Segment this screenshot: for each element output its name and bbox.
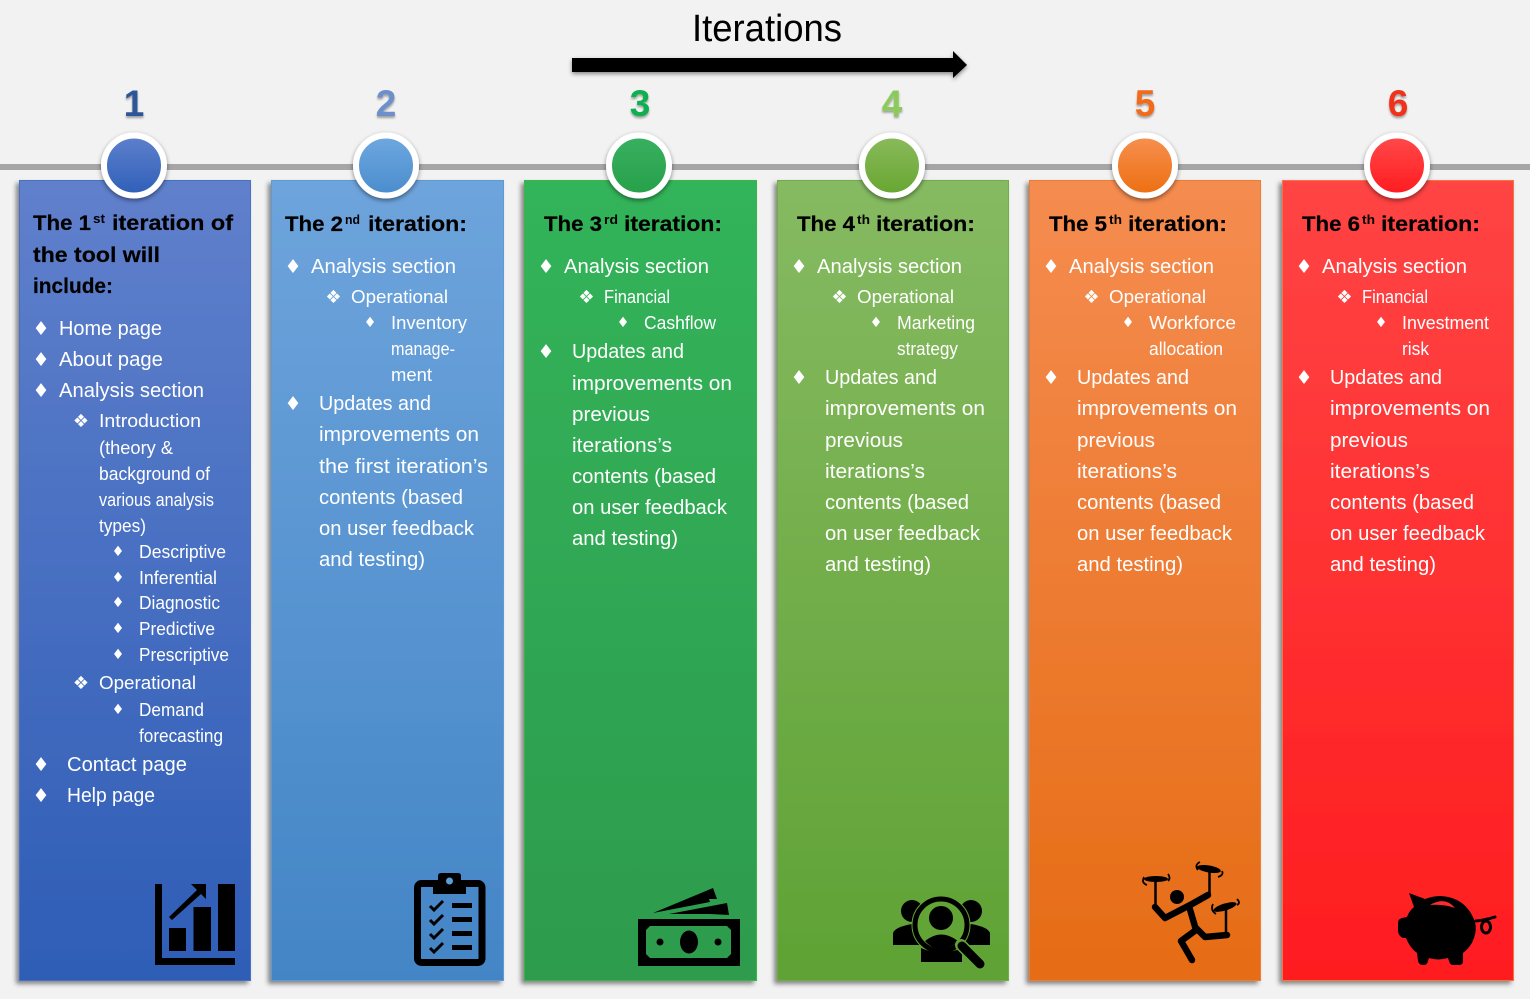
timeline node 6 [1367, 136, 1427, 196]
list 4: previous [825, 430, 903, 452]
timeline bar [0, 164, 1530, 170]
heading 3: rd [604, 212, 618, 227]
list 4: Operational [857, 287, 954, 307]
list 3: Updates and [572, 341, 684, 363]
list 2: manage- [391, 339, 455, 359]
list 6: ♦ [1295, 256, 1313, 278]
list 3: and testing) [572, 528, 678, 550]
heading 3 [544, 212, 722, 236]
list 3: ♦ [537, 256, 555, 278]
list 4: and testing) [825, 554, 931, 576]
list 2: and testing) [319, 549, 425, 571]
list 5: Updates and [1077, 367, 1189, 389]
title: Iterations [692, 8, 842, 50]
number 4: 4 [882, 83, 903, 124]
list 2: on user feedback [319, 518, 475, 540]
heading 2 [285, 212, 467, 236]
heading 5: iteration: [1128, 213, 1227, 236]
heading 4: The 4 [797, 213, 855, 236]
list 6: ♦ [1295, 367, 1313, 389]
list 5: Operational [1109, 287, 1206, 307]
list 4: improvements on [825, 398, 985, 420]
list 4: ♦ [790, 256, 808, 278]
list 1: ♦ [32, 380, 50, 402]
heading 4 [797, 212, 975, 236]
list 2 [284, 256, 488, 571]
list 2: improvements on [319, 424, 479, 446]
panel: iteration 1 [20, 83, 250, 980]
heading 4: iteration: [876, 213, 975, 236]
list 5 [1042, 256, 1237, 576]
list 4: ♦ [790, 367, 808, 389]
list 6: on user feedback [1330, 523, 1486, 545]
list 5: and testing) [1077, 554, 1183, 576]
panel: iteration 2 [272, 83, 504, 980]
heading 3: iteration: [624, 213, 722, 236]
icon: piggy bank [1398, 893, 1495, 965]
icon: people under magnifier [893, 897, 990, 964]
list 1: Descriptive [139, 542, 226, 562]
list 2: ment [391, 365, 432, 385]
list 1: ♦ [32, 349, 50, 371]
list 5: ♦ [1122, 315, 1134, 331]
list 4: ❖ [831, 287, 848, 308]
list 1: ♦ [112, 544, 124, 560]
list 3 [537, 256, 732, 550]
list 3: ♦ [537, 341, 555, 363]
list 3: contents (based [572, 466, 716, 488]
list 1: Contact page [67, 754, 187, 776]
heading 1: include: [33, 275, 113, 298]
list 1: Demand [139, 700, 204, 720]
timeline node 1 [104, 136, 164, 196]
list 5: ❖ [1083, 287, 1100, 308]
list 1: Introduction [99, 411, 201, 431]
list 1: ♦ [112, 570, 124, 586]
list 1: types) [99, 516, 146, 536]
list 4: contents (based [825, 492, 969, 514]
list 4: Marketing [897, 313, 975, 333]
list 1: ♦ [32, 754, 50, 776]
list 4: strategy [897, 339, 958, 359]
list 1: ❖ [73, 673, 89, 694]
list 1: ♦ [112, 621, 124, 637]
timeline node 3 [609, 136, 669, 196]
list 6: ♦ [1375, 315, 1387, 331]
heading 4: th [857, 212, 870, 227]
panel: iteration 3 [524, 83, 756, 980]
list 5: Workforce [1149, 313, 1236, 333]
timeline node 5 [1115, 136, 1175, 196]
list 2: Operational [351, 287, 448, 307]
list 3: ❖ [578, 287, 595, 308]
list 6: risk [1402, 339, 1430, 359]
heading 2: The 2 [285, 213, 343, 236]
heading 6: iteration: [1381, 213, 1480, 236]
list 1: About page [59, 349, 163, 371]
list 1: Help page [67, 785, 155, 807]
list 1: Diagnostic [139, 593, 220, 613]
list 5: previous [1077, 430, 1155, 452]
list 1: forecasting [139, 726, 223, 746]
list 1 [32, 318, 229, 807]
list 2: Updates and [319, 393, 431, 415]
list 2: ❖ [325, 287, 342, 308]
list 2: ♦ [284, 393, 302, 415]
list 6: Financial [1362, 287, 1428, 307]
heading 1: the tool will [33, 244, 160, 267]
list 1: ♦ [32, 318, 50, 340]
timeline node 4 [862, 136, 922, 196]
list 6: contents (based [1330, 492, 1474, 514]
heading 5 [1049, 212, 1227, 236]
list 6: and testing) [1330, 554, 1436, 576]
list 5: contents (based [1077, 492, 1221, 514]
number 3: 3 [630, 83, 650, 124]
arrow: iterations direction [572, 51, 967, 78]
heading 2: iteration: [368, 213, 467, 236]
list 1: ♦ [32, 785, 50, 807]
heading 6: th [1362, 212, 1375, 227]
list 5: improvements on [1077, 398, 1237, 420]
list 1: Home page [59, 318, 162, 340]
icon: banknotes [638, 888, 740, 966]
list 4: Updates and [825, 367, 937, 389]
number 5: 5 [1135, 83, 1155, 124]
list 3: Cashflow [644, 313, 717, 333]
list 6: Investment [1402, 313, 1489, 333]
list 1: (theory & [99, 438, 173, 458]
list 1: background of [99, 464, 211, 484]
heading 5: The 5 [1049, 213, 1107, 236]
heading 1: The 1 [33, 212, 91, 235]
list 4 [790, 256, 985, 576]
list 1: ♦ [112, 702, 124, 718]
panel: iteration 6 [1282, 83, 1514, 980]
list 4: ♦ [870, 315, 882, 331]
list 1: Prescriptive [139, 645, 229, 665]
icon: bar chart with rising arrow [155, 884, 235, 965]
heading 1: iteration of [112, 212, 234, 235]
list 5: ♦ [1042, 256, 1060, 278]
list 5: on user feedback [1077, 523, 1233, 545]
list 1: ♦ [112, 595, 124, 611]
list 2: Inventory [391, 313, 467, 333]
heading 1: st [93, 211, 106, 226]
number 2: 2 [376, 83, 396, 124]
list 6: Analysis section [1322, 256, 1467, 278]
list 4: iterations’s [825, 461, 925, 483]
list 4: on user feedback [825, 523, 981, 545]
icon: juggler spinning plates [1143, 862, 1239, 960]
list 2: Analysis section [311, 256, 456, 278]
list 1: Operational [99, 673, 196, 693]
list 3: improvements on [572, 373, 732, 395]
list 1: Inferential [139, 568, 217, 588]
list 3: iterations’s [572, 435, 672, 457]
heading 5: th [1109, 212, 1122, 227]
list 1: ❖ [73, 411, 89, 432]
panel: iteration 4 [778, 83, 1008, 980]
list 6: iterations’s [1330, 461, 1430, 483]
list 3: ♦ [617, 315, 629, 331]
list 5: Analysis section [1069, 256, 1214, 278]
heading 3: The 3 [544, 213, 602, 236]
number 1: 1 [124, 83, 144, 124]
heading 2: nd [345, 212, 360, 227]
list 3: Financial [604, 287, 670, 307]
list 2: the first iteration’s [319, 456, 488, 478]
list 1: various analysis [99, 490, 214, 510]
list 4: Analysis section [817, 256, 962, 278]
list 3: previous [572, 404, 650, 426]
list 2: ♦ [364, 315, 376, 331]
list 5: allocation [1149, 339, 1223, 359]
heading 6: The 6 [1302, 213, 1360, 236]
list 1: ♦ [112, 647, 124, 663]
list 3: Analysis section [564, 256, 709, 278]
list 1: Analysis section [59, 380, 204, 402]
list 6: ❖ [1336, 287, 1353, 308]
heading 6 [1302, 212, 1480, 236]
timeline node 2 [356, 136, 416, 196]
list 6 [1295, 256, 1490, 576]
list 6: improvements on [1330, 398, 1490, 420]
list 1: Predictive [139, 619, 215, 639]
list 5: ♦ [1042, 367, 1060, 389]
list 2: ♦ [284, 256, 302, 278]
list 3: on user feedback [572, 497, 728, 519]
list 6: Updates and [1330, 367, 1442, 389]
list 2: contents (based [319, 487, 463, 509]
icon: clipboard checklist [418, 873, 482, 962]
list 5: iterations’s [1077, 461, 1177, 483]
number 6: 6 [1388, 83, 1408, 124]
heading 1 [33, 211, 234, 298]
panel: iteration 5 [1030, 83, 1260, 980]
list 6: previous [1330, 430, 1408, 452]
